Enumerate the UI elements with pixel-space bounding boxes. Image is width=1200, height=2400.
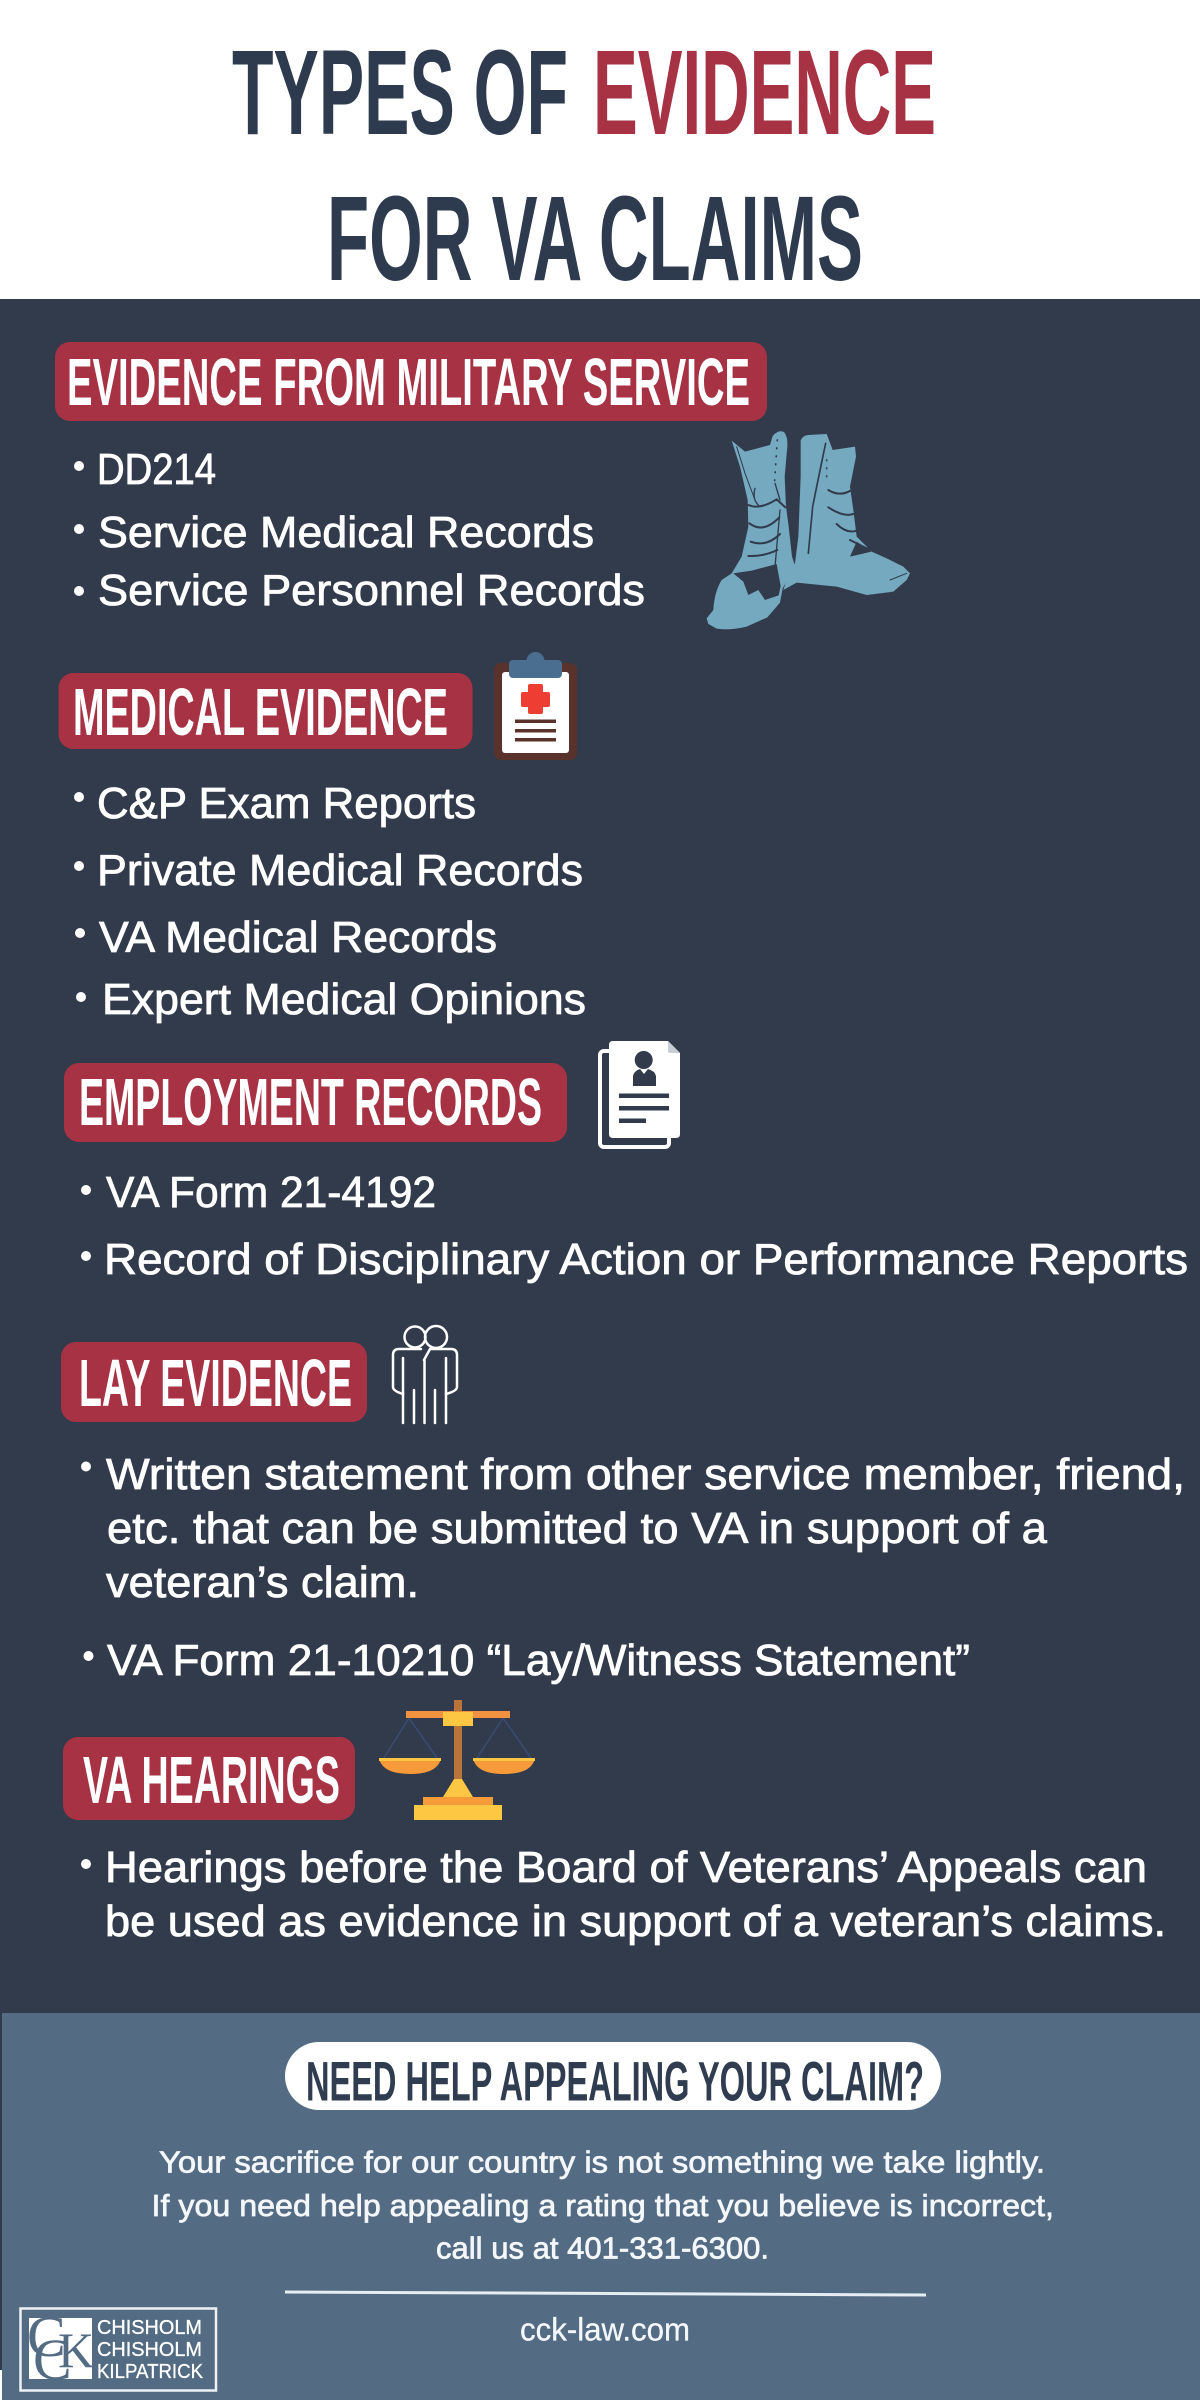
heading pill: evidence from military service <box>55 342 767 421</box>
list: employment items: VA Form 21-4192 <box>106 1169 436 1217</box>
list: medical evidence items <box>74 780 586 1024</box>
panel: medical evidence <box>58 652 586 1024</box>
list: medical evidence items: C&P Exam Reports <box>97 780 476 828</box>
list: lay evidence items: Written statement from other service member, friend, <box>106 1451 1185 1499</box>
title <box>232 24 936 306</box>
list: medical evidence items: VA Medical Records <box>99 914 497 962</box>
heading pill: employment records: EMPLOYMENT RECORDS <box>79 1065 542 1140</box>
heading pill: lay evidence: LAY EVIDENCE <box>79 1346 352 1421</box>
heading pill: va hearings: VA HEARINGS <box>83 1743 340 1818</box>
list: lay evidence items: etc. that can be submitted to VA in support of a <box>107 1505 1048 1553</box>
list: hearings item <box>81 1844 1166 1946</box>
logo: chisholm chisholm kilpatrick: C <box>27 2304 66 2369</box>
panel: employment records <box>64 1041 1188 1284</box>
list: employment items: Record of Disciplinary Action or Performance Reports <box>104 1236 1188 1284</box>
icon: medical clipboard <box>494 652 577 760</box>
text block: appeal message: call us at 401-331-6300. <box>436 2230 769 2266</box>
list: military service items: DD214 <box>97 446 216 494</box>
list: medical evidence items: Expert Medical Opinions <box>102 976 586 1024</box>
panel: evidence from military service <box>55 342 910 629</box>
logo: chisholm chisholm kilpatrick: KILPATRICK <box>97 2361 204 2383</box>
logo: chisholm chisholm kilpatrick: C <box>33 2327 72 2392</box>
panel: main dark background <box>0 299 1200 2013</box>
list: hearings item: Hearings before the Board of Veterans’ Appeals can <box>105 1844 1147 1892</box>
heading pill: lay evidence <box>61 1342 367 1422</box>
panel: call to action footer <box>20 2042 1054 2392</box>
list: military service items <box>74 446 645 615</box>
panel: lay evidence <box>61 1326 1185 1685</box>
heading pill: medical evidence: MEDICAL EVIDENCE <box>73 675 448 750</box>
list: lay evidence items: VA Form 21-10210 “Lay/Witness Statement” <box>107 1637 970 1685</box>
logo: chisholm chisholm kilpatrick <box>20 2304 216 2392</box>
icon: two people outline <box>393 1326 457 1423</box>
heading pill: need help <box>285 2042 941 2112</box>
list: hearings item: be used as evidence in support of a veteran’s claims. <box>105 1898 1166 1946</box>
list: military service items: Service Personnel Records <box>98 567 645 615</box>
list: medical evidence items: Private Medical Records <box>97 847 583 895</box>
panel: footer background <box>2 2013 1200 2400</box>
logo: chisholm chisholm kilpatrick: K <box>58 2322 94 2378</box>
logo: chisholm chisholm kilpatrick: CHISHOLM <box>97 2339 202 2361</box>
text block: appeal message <box>152 2144 1054 2266</box>
title: TYPES OF <box>232 24 568 160</box>
logo: chisholm chisholm kilpatrick: CHISHOLM <box>97 2317 202 2339</box>
divider line <box>285 2292 926 2295</box>
icon: combat boots <box>707 431 910 629</box>
icon: personnel document <box>600 1041 680 1147</box>
title: EVIDENCE <box>593 24 936 160</box>
left edge strip <box>0 2013 2 2370</box>
text block: appeal message: If you need help appealing a rating that you believe is incorrect, <box>152 2188 1054 2223</box>
list: employment items <box>81 1169 1188 1284</box>
icon: balance scales <box>379 1700 535 1820</box>
panel: va hearings <box>63 1700 1166 1946</box>
heading pill: employment records <box>64 1063 567 1142</box>
list: military service items: Service Medical Records <box>98 509 594 557</box>
heading pill: medical evidence <box>58 673 472 750</box>
text block: appeal message: Your sacrifice for our country is not something we take lightly. <box>159 2144 1045 2180</box>
heading pill: va hearings <box>63 1737 355 1820</box>
list: lay evidence items: veteran’s claim. <box>106 1559 419 1607</box>
list: lay evidence items <box>81 1451 1185 1685</box>
website url: cck-law.com <box>520 2312 690 2348</box>
